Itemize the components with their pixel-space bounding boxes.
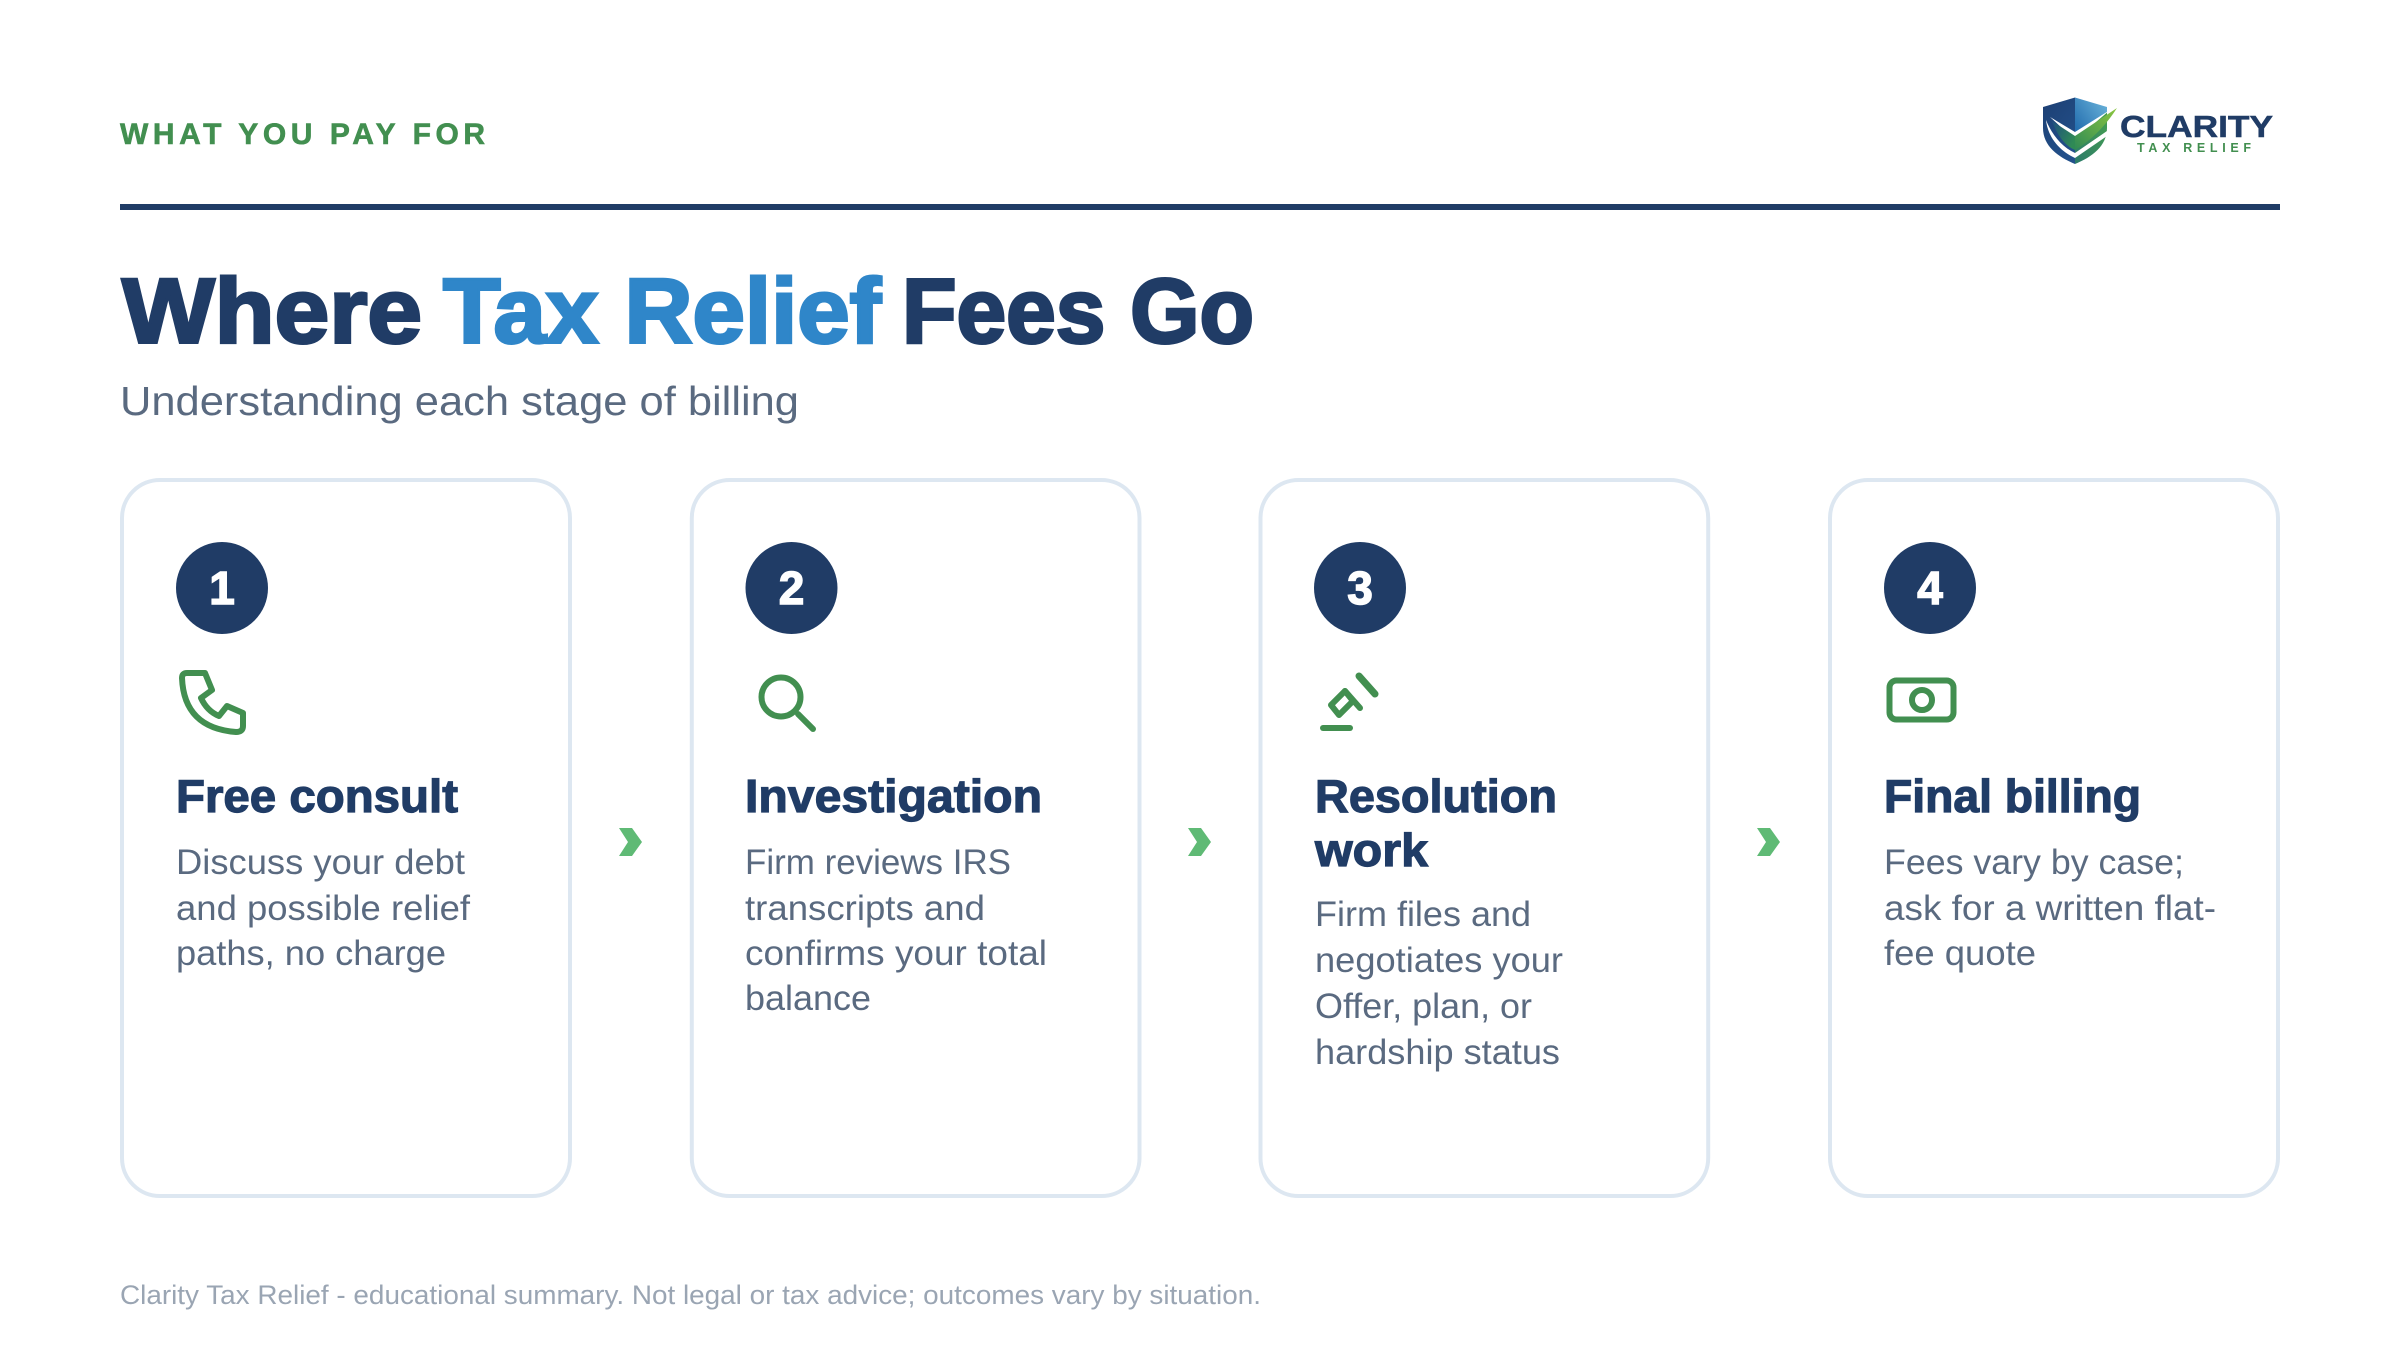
description: confirms your total bbox=[745, 934, 1047, 973]
title bbox=[122, 260, 1254, 362]
description: balance bbox=[745, 979, 871, 1018]
panel: step 4 final billing bbox=[1830, 480, 2278, 1196]
footer disclaimer: Clarity Tax Relief - educational summary. Not legal or tax advice; outcomes vary by situation. bbox=[120, 1280, 1261, 1310]
description: Offer, plan, or bbox=[1315, 987, 1532, 1026]
icon: phone bbox=[182, 673, 243, 732]
icon: magnifier bbox=[762, 678, 813, 729]
heading: Free consult: Free consult bbox=[176, 770, 458, 822]
description: Firm reviews IRS bbox=[745, 843, 1011, 882]
heading: Final billing: Final billing bbox=[1884, 770, 2141, 822]
description: transcripts and bbox=[745, 889, 985, 928]
description: fee quote bbox=[1884, 934, 2036, 973]
icon: banknote bbox=[1890, 680, 1954, 720]
badge: 3: 3 bbox=[1347, 562, 1373, 614]
icon: gavel bbox=[1323, 676, 1375, 728]
panel: step 3 resolution work bbox=[1260, 480, 1708, 1196]
description: hardship status bbox=[1315, 1033, 1560, 1072]
title: Tax Relief bbox=[443, 260, 881, 362]
eyebrow label: WHAT YOU PAY FOR bbox=[120, 118, 485, 151]
description bbox=[1884, 843, 2216, 973]
description: Firm files and bbox=[1315, 895, 1531, 934]
logo: Clarity Tax Relief: TAX RELIEF bbox=[2137, 141, 2251, 155]
badge: 4 bbox=[1884, 542, 1976, 634]
badge: 1 bbox=[176, 542, 268, 634]
arrow 1 bbox=[619, 828, 642, 856]
badge: 2: 2 bbox=[779, 562, 804, 614]
header rule bbox=[120, 204, 2280, 210]
description: paths, no charge bbox=[176, 934, 446, 973]
description: ask for a written flat- bbox=[1884, 889, 2216, 928]
heading: Resolution work bbox=[1314, 770, 1557, 876]
panel: step 2 investigation bbox=[692, 480, 1140, 1196]
badge: 4: 4 bbox=[1917, 562, 1943, 614]
description bbox=[1315, 895, 1563, 1072]
description: Fees vary by case; bbox=[1884, 843, 2184, 882]
heading: Resolution work: Resolution bbox=[1315, 770, 1557, 822]
description: and possible relief bbox=[176, 889, 470, 928]
badge: 1: 1 bbox=[209, 562, 235, 614]
arrow 2 bbox=[1188, 828, 1211, 856]
title: Fees Go bbox=[902, 260, 1254, 362]
logo: Clarity Tax Relief bbox=[2043, 98, 2273, 164]
badge: 3 bbox=[1314, 542, 1406, 634]
arrow 3 bbox=[1757, 828, 1780, 856]
badge: 2 bbox=[746, 542, 838, 634]
panel: step 1 free consult bbox=[122, 480, 570, 1196]
heading: Investigation: Investigation bbox=[745, 770, 1042, 822]
description bbox=[176, 843, 470, 973]
logo: Clarity Tax Relief: CLARITY bbox=[2120, 109, 2273, 144]
title: Where bbox=[122, 260, 422, 362]
subtitle: Understanding each stage of billing bbox=[120, 378, 799, 424]
description: negotiates your bbox=[1315, 941, 1563, 980]
description: Discuss your debt bbox=[176, 843, 465, 882]
heading: Resolution work: work bbox=[1314, 824, 1428, 876]
description bbox=[745, 843, 1047, 1018]
